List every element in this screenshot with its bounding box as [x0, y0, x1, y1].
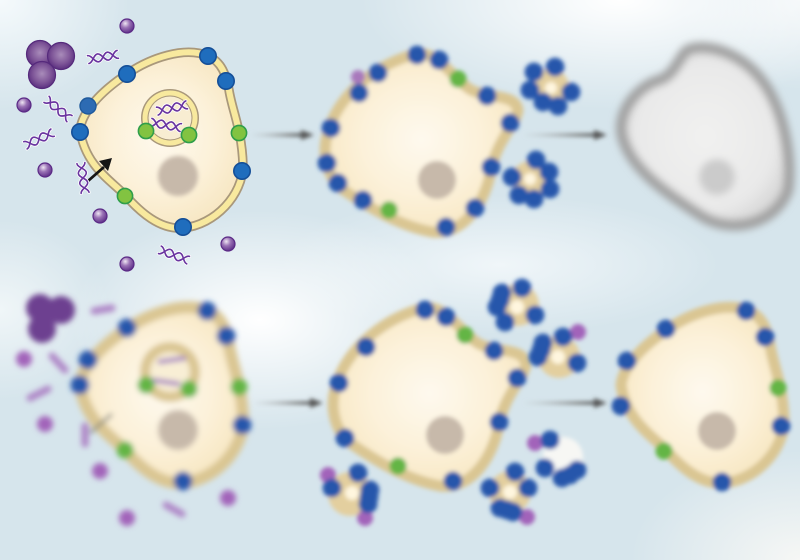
panel: bottom exosome fragments: [320, 279, 586, 526]
fragment lower: [503, 151, 559, 208]
membrane receptors: [318, 46, 519, 236]
cell outline: [621, 48, 789, 225]
nucleus: [158, 156, 198, 196]
panel: top-left infected cell: [17, 19, 250, 271]
fragment E: [320, 464, 379, 526]
vacuole with nucleic acid: [138, 89, 199, 147]
fragment D: [481, 463, 537, 525]
cell membrane and cytoplasm: [80, 52, 243, 228]
vacuole: [140, 342, 200, 402]
membrane receptors: [72, 48, 250, 235]
arrow: bottom first: [255, 398, 323, 408]
virus particles: [17, 19, 235, 271]
arrow: bottom second: [525, 398, 607, 408]
arrow: top second: [525, 130, 607, 140]
cell body: [325, 54, 518, 232]
blurred bacteria cluster: [26, 294, 75, 343]
cell body: [80, 307, 243, 483]
panel: bottom-middle budding cell: [330, 301, 526, 490]
fragment upper: [521, 58, 580, 115]
panel: bottom-left infected cell: [16, 294, 251, 526]
blurred virus particles: [16, 351, 236, 526]
membrane receptors: [612, 302, 790, 491]
nucleus: [698, 412, 736, 450]
cell body: [621, 307, 784, 483]
fragment A: [488, 279, 544, 331]
panel: top exosome fragments: [503, 58, 580, 208]
fragment C: [527, 431, 586, 487]
nucleic acid strands outside: [24, 50, 189, 264]
panel: top-right ghost cell: [621, 48, 789, 225]
cell body: [333, 308, 526, 486]
icon: entry arrow: [88, 158, 112, 181]
nucleus: [699, 159, 735, 195]
membrane receptors: [330, 301, 526, 490]
arrow: top first: [252, 130, 314, 140]
blurred strands: [30, 308, 182, 514]
nucleus: [426, 416, 464, 454]
panel: top-middle budding cell: [318, 46, 519, 236]
nucleus: [158, 410, 198, 450]
membrane receptors: [71, 302, 251, 490]
panel: bottom-right recovered cell: [612, 302, 790, 491]
faded entry arrow: [90, 414, 112, 433]
fragment B: [529, 324, 586, 378]
purple remnant: [351, 70, 365, 84]
nucleus: [418, 161, 456, 199]
bacteria cluster: [26, 40, 74, 88]
